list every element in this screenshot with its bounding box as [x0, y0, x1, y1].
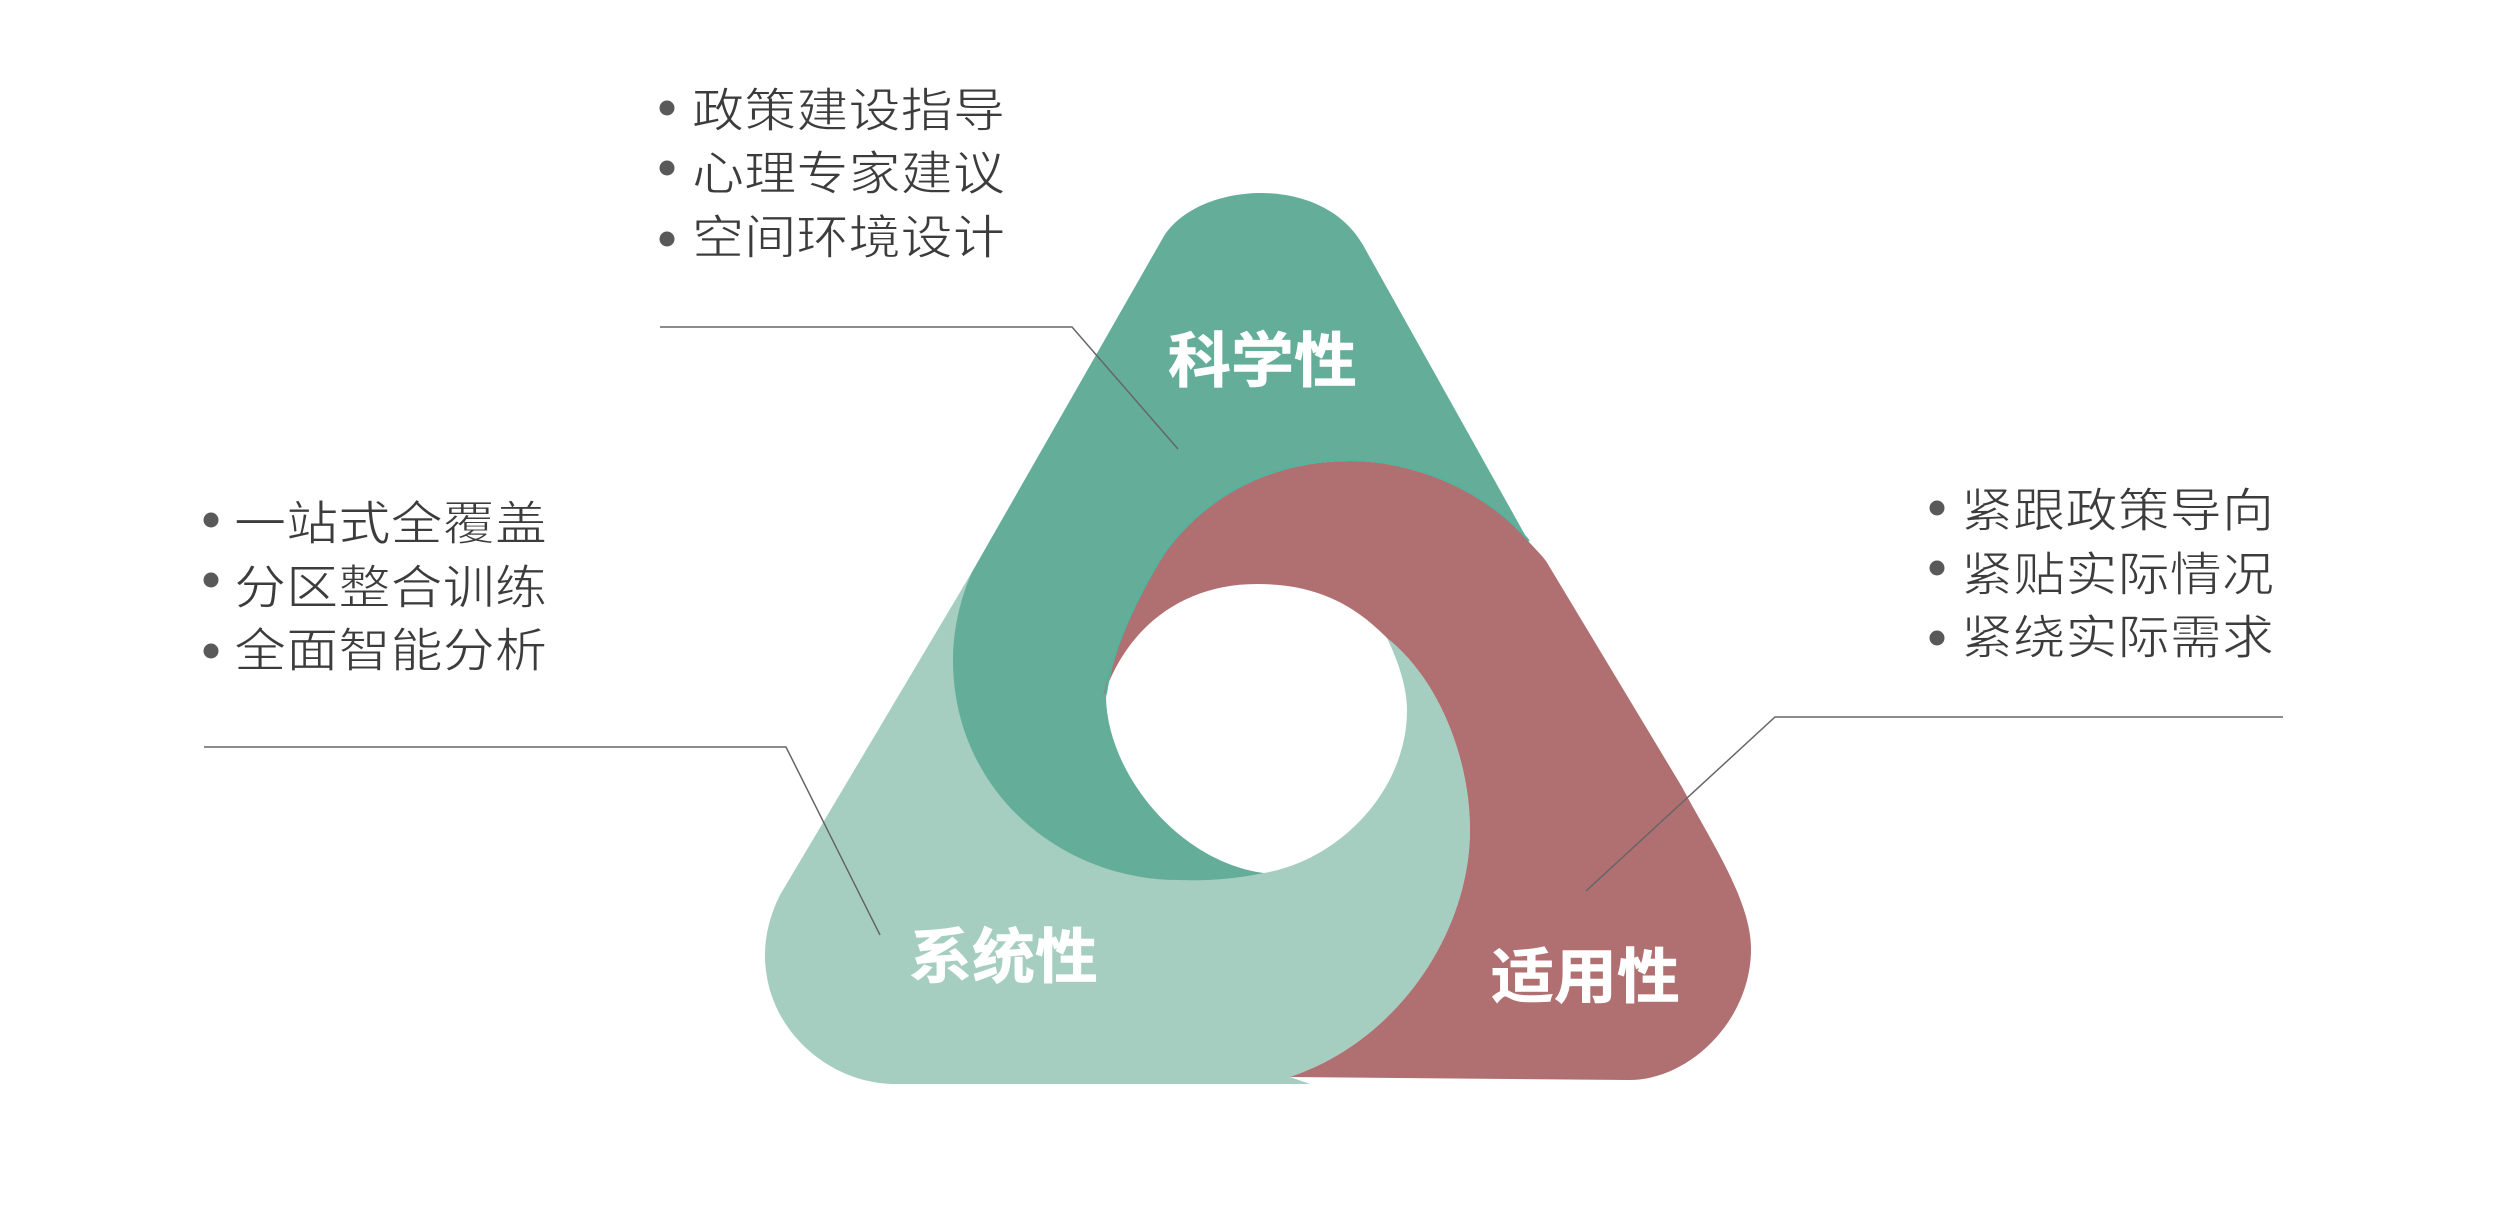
text block: applicable bullets: 紧贴实际情况 [1961, 548, 2274, 601]
text block: applicable bullets [1930, 484, 2274, 664]
text block: scientific bullets: 空间环境设计 [692, 211, 1005, 264]
text block: applicable bullets: 紧跟政策导向 [1961, 484, 2274, 537]
text block: scientific bullets: 政策建设指导 [692, 84, 1005, 137]
text block: systematic bullets: 全面智能分析 [234, 624, 547, 677]
triangle diagram [765, 193, 1751, 1084]
segment: applicable (red) [1103, 461, 1751, 1080]
heading: 适用性: 适用性 [1491, 944, 1680, 1011]
leader line: systematic [204, 747, 880, 935]
leader line: applicable [1586, 717, 2283, 891]
leader line: scientific [660, 327, 1178, 449]
segment: scientific (green) [953, 193, 1529, 880]
heading: 科学性: 科学性 [1168, 328, 1357, 395]
text block: scientific bullets [660, 84, 1005, 264]
segment: systematic (pale green) [765, 572, 1470, 1084]
text block: systematic bullets: 分区整合训练 [234, 561, 547, 614]
text block: systematic bullets [204, 497, 547, 677]
heading: 系统性: 系统性 [909, 924, 1098, 991]
text block: systematic bullets: 一站式全覆盖 [234, 497, 547, 550]
text block: applicable bullets: 紧绕实际需求 [1961, 611, 2274, 664]
text block: scientific bullets: 心理专家建议 [692, 147, 1005, 200]
highlight edge between green and red [1106, 460, 1529, 694]
